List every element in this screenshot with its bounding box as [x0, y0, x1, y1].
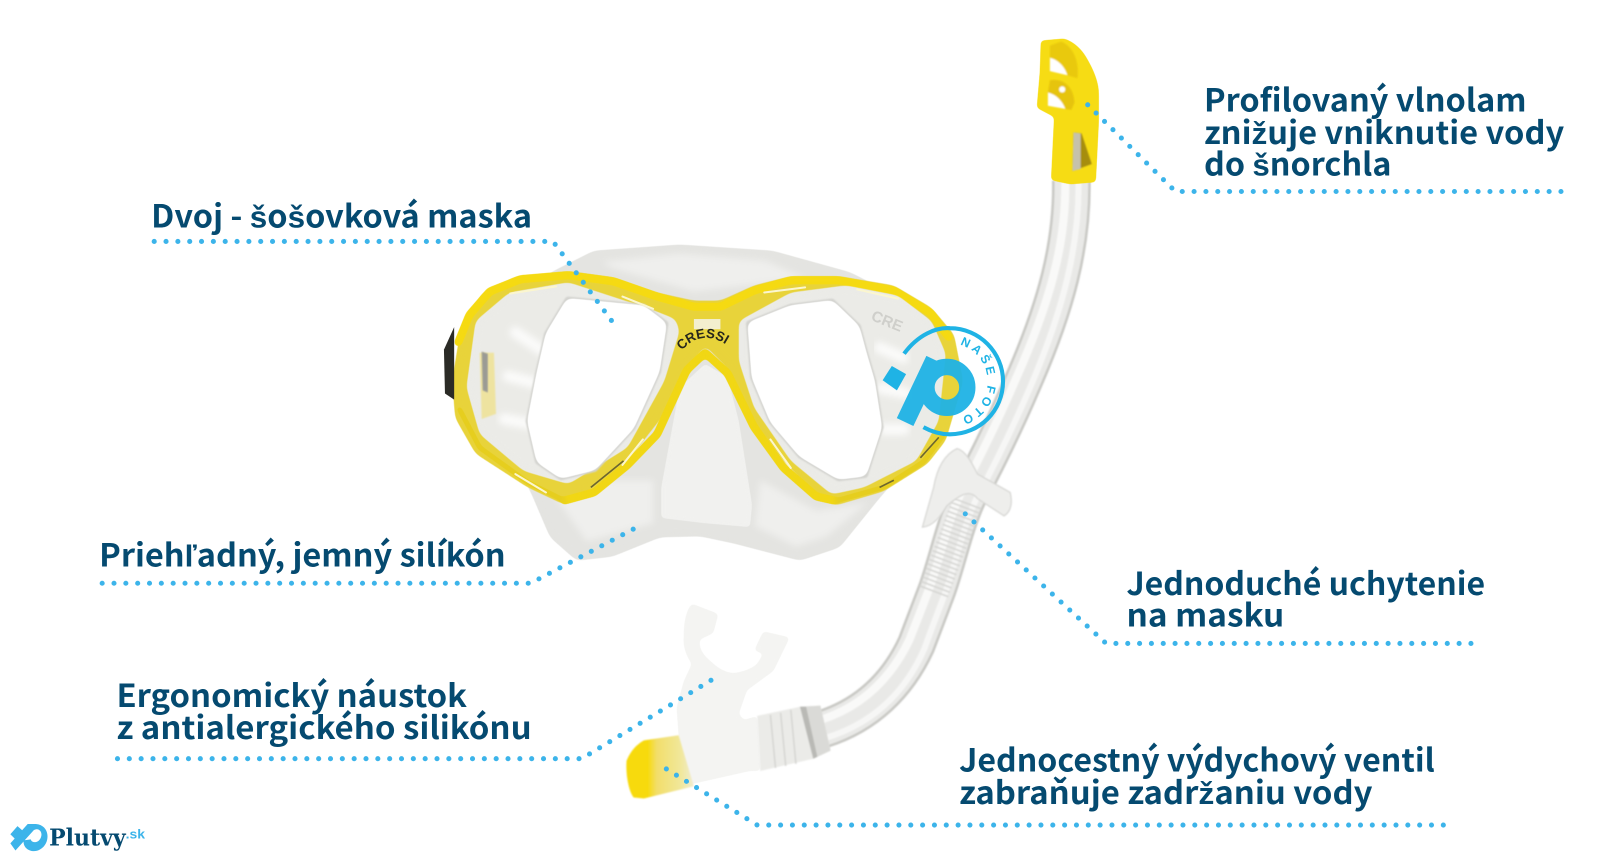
callout: priehľadný silikón [99, 524, 643, 583]
stamp: naše foto [882, 326, 1006, 436]
callout: dvoj-šošovková maska: Dvoj - šošovková maska [151, 192, 532, 238]
stamp letter p [905, 360, 967, 422]
frame dark details [591, 437, 939, 487]
right lens [750, 303, 880, 477]
mask clip on the tube [922, 449, 1011, 527]
callout: jednoduché uchytenie: na masku [1126, 591, 1284, 636]
yellow frame [452, 271, 963, 506]
gray brand on gasket: CRE [869, 308, 905, 336]
brand on bridge: CRESSI [677, 328, 730, 348]
callout: priehľadný silikón: Priehľadný, jemný silíkón [99, 531, 506, 576]
nose pocket [661, 364, 752, 527]
callout: jednocestný ventil: Jednocestný výdychový ventil [959, 736, 1435, 781]
lens shadow rings [530, 301, 880, 477]
callout: ergonomický náustok: Ergonomický náustok [116, 672, 468, 717]
callout: ergonomický náustok: z antialergického silikónu [116, 704, 532, 749]
silicone skirt [490, 245, 939, 561]
lens gaskets [466, 282, 946, 494]
callout: jednoduché uchytenie: Jednoduché uchytenie [1126, 559, 1485, 605]
callout: dvoj-šošovková maska [151, 192, 616, 327]
brand on bridge [677, 319, 730, 348]
stamp ring [904, 328, 1003, 434]
yellow splash guard [1037, 38, 1099, 184]
lighter skirt interior [551, 254, 867, 547]
bright yellow rim [458, 275, 949, 501]
logo: Plutvy.sk: .sk [126, 826, 146, 841]
tube [820, 180, 1079, 738]
callout: profilovaný vlnolam: znižuje vniknutie vody [1204, 109, 1565, 154]
left lens [530, 301, 664, 476]
frame highlight dashes [510, 286, 898, 492]
callout: jednocestný ventil [666, 736, 1447, 825]
callout: jednoduché uchytenie [965, 514, 1485, 643]
mouthpiece [677, 604, 831, 787]
callout: profilovaný vlnolam [1088, 76, 1565, 191]
logo: Plutvy.sk: Plutvy [49, 823, 127, 851]
yellow purge valve [626, 735, 694, 799]
callout: ergonomický náustok [116, 672, 711, 759]
callout: profilovaný vlnolam: do šnorchla [1204, 140, 1391, 186]
stamp text: NAŠE FOTO [960, 337, 996, 424]
logo: Plutvy.sk [10, 823, 146, 851]
callout: profilovaný vlnolam: Profilovaný vlnolam [1204, 76, 1527, 121]
callout: jednocestný ventil: zabraňuje zadržaniu vody [959, 769, 1373, 814]
stamp square [883, 366, 906, 390]
snorchel [626, 38, 1099, 799]
strap buckle [444, 327, 454, 400]
mask [444, 244, 962, 560]
